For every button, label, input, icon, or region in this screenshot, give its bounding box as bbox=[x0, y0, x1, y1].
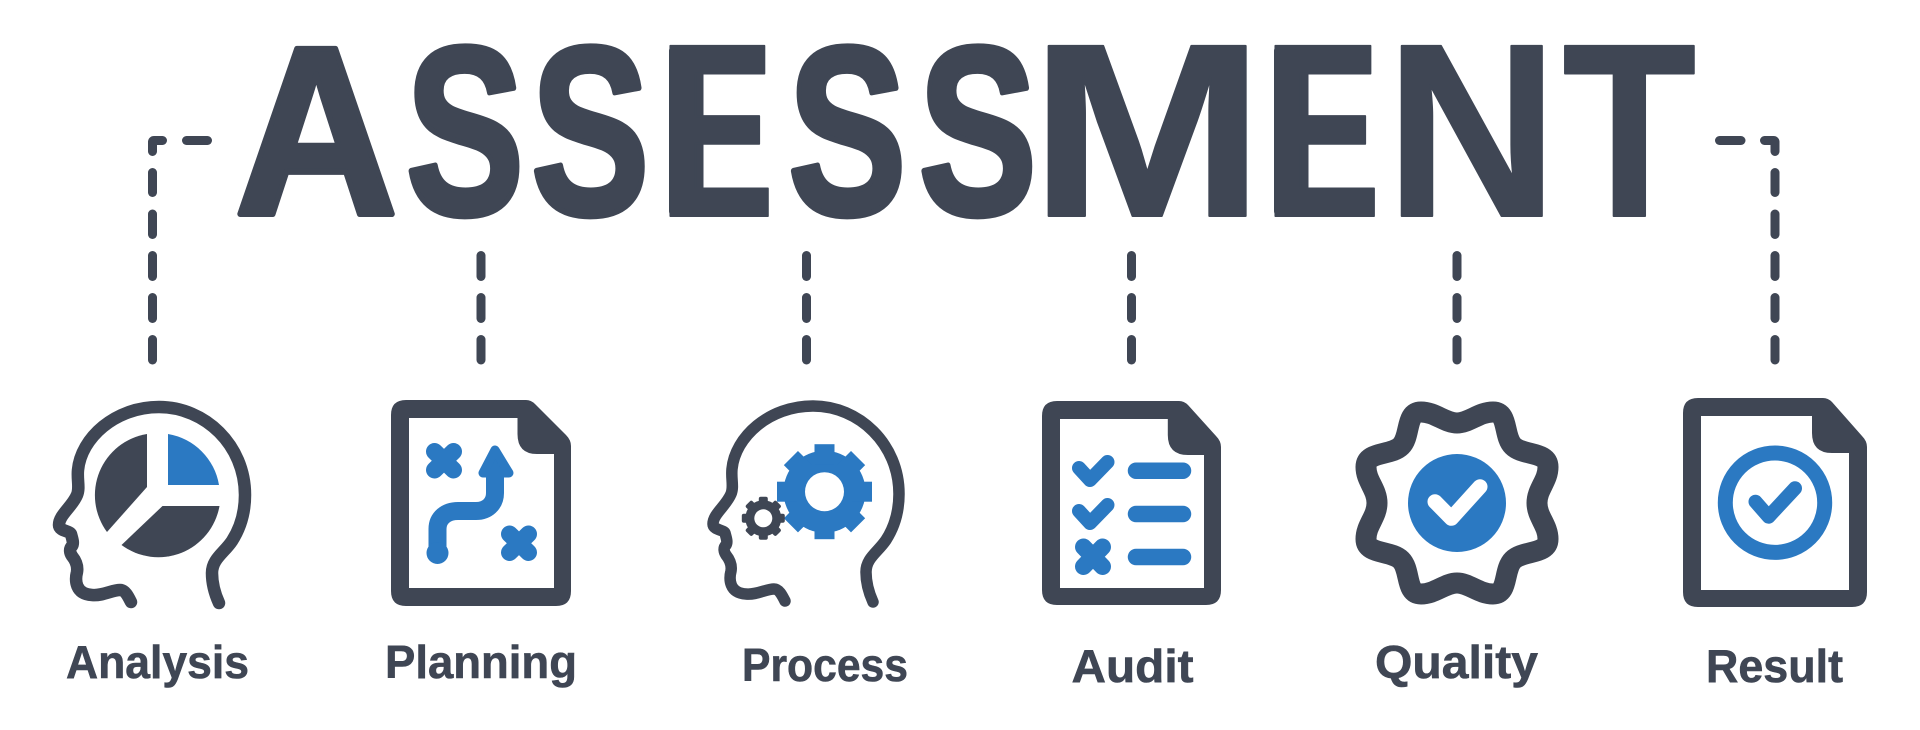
title: T bbox=[1562, 0, 1696, 269]
label: Result: Result bbox=[1706, 640, 1843, 692]
panel: process bbox=[713, 406, 908, 691]
icon: head with pie chart bbox=[59, 407, 245, 603]
connector: planning bbox=[476, 256, 486, 360]
label: Planning: Planning bbox=[385, 636, 577, 688]
connector: result bbox=[1720, 140, 1775, 360]
label: Analysis: Analysis bbox=[66, 636, 249, 688]
icon: quality badge bbox=[1366, 412, 1548, 594]
title: S bbox=[918, 0, 1037, 265]
icon: checklist document bbox=[1042, 401, 1221, 605]
panel: audit bbox=[1042, 401, 1221, 692]
icon: plan document bbox=[391, 400, 571, 606]
panel: quality bbox=[1366, 412, 1548, 688]
connector: analysis bbox=[152, 140, 208, 360]
panel: planning bbox=[385, 400, 577, 688]
connector: process bbox=[802, 256, 811, 360]
title: N bbox=[1386, 0, 1558, 269]
label: Audit: Audit bbox=[1072, 640, 1194, 692]
title: M bbox=[1030, 0, 1264, 269]
title: A bbox=[234, 0, 398, 265]
title: S bbox=[788, 0, 906, 265]
icon: result document bbox=[1683, 398, 1867, 607]
connector: audit bbox=[1127, 256, 1136, 360]
title: E bbox=[658, 0, 775, 269]
panel: analysis bbox=[59, 407, 249, 688]
title: E bbox=[1263, 0, 1381, 269]
icon: head with gears bbox=[713, 406, 899, 602]
label: Process: Process bbox=[742, 639, 908, 691]
panel: result bbox=[1683, 398, 1867, 692]
title: S bbox=[531, 0, 649, 265]
connector: quality bbox=[1452, 256, 1462, 360]
title: S bbox=[406, 0, 524, 265]
label: Quality: Quality bbox=[1375, 636, 1538, 688]
title bbox=[234, 0, 1696, 269]
